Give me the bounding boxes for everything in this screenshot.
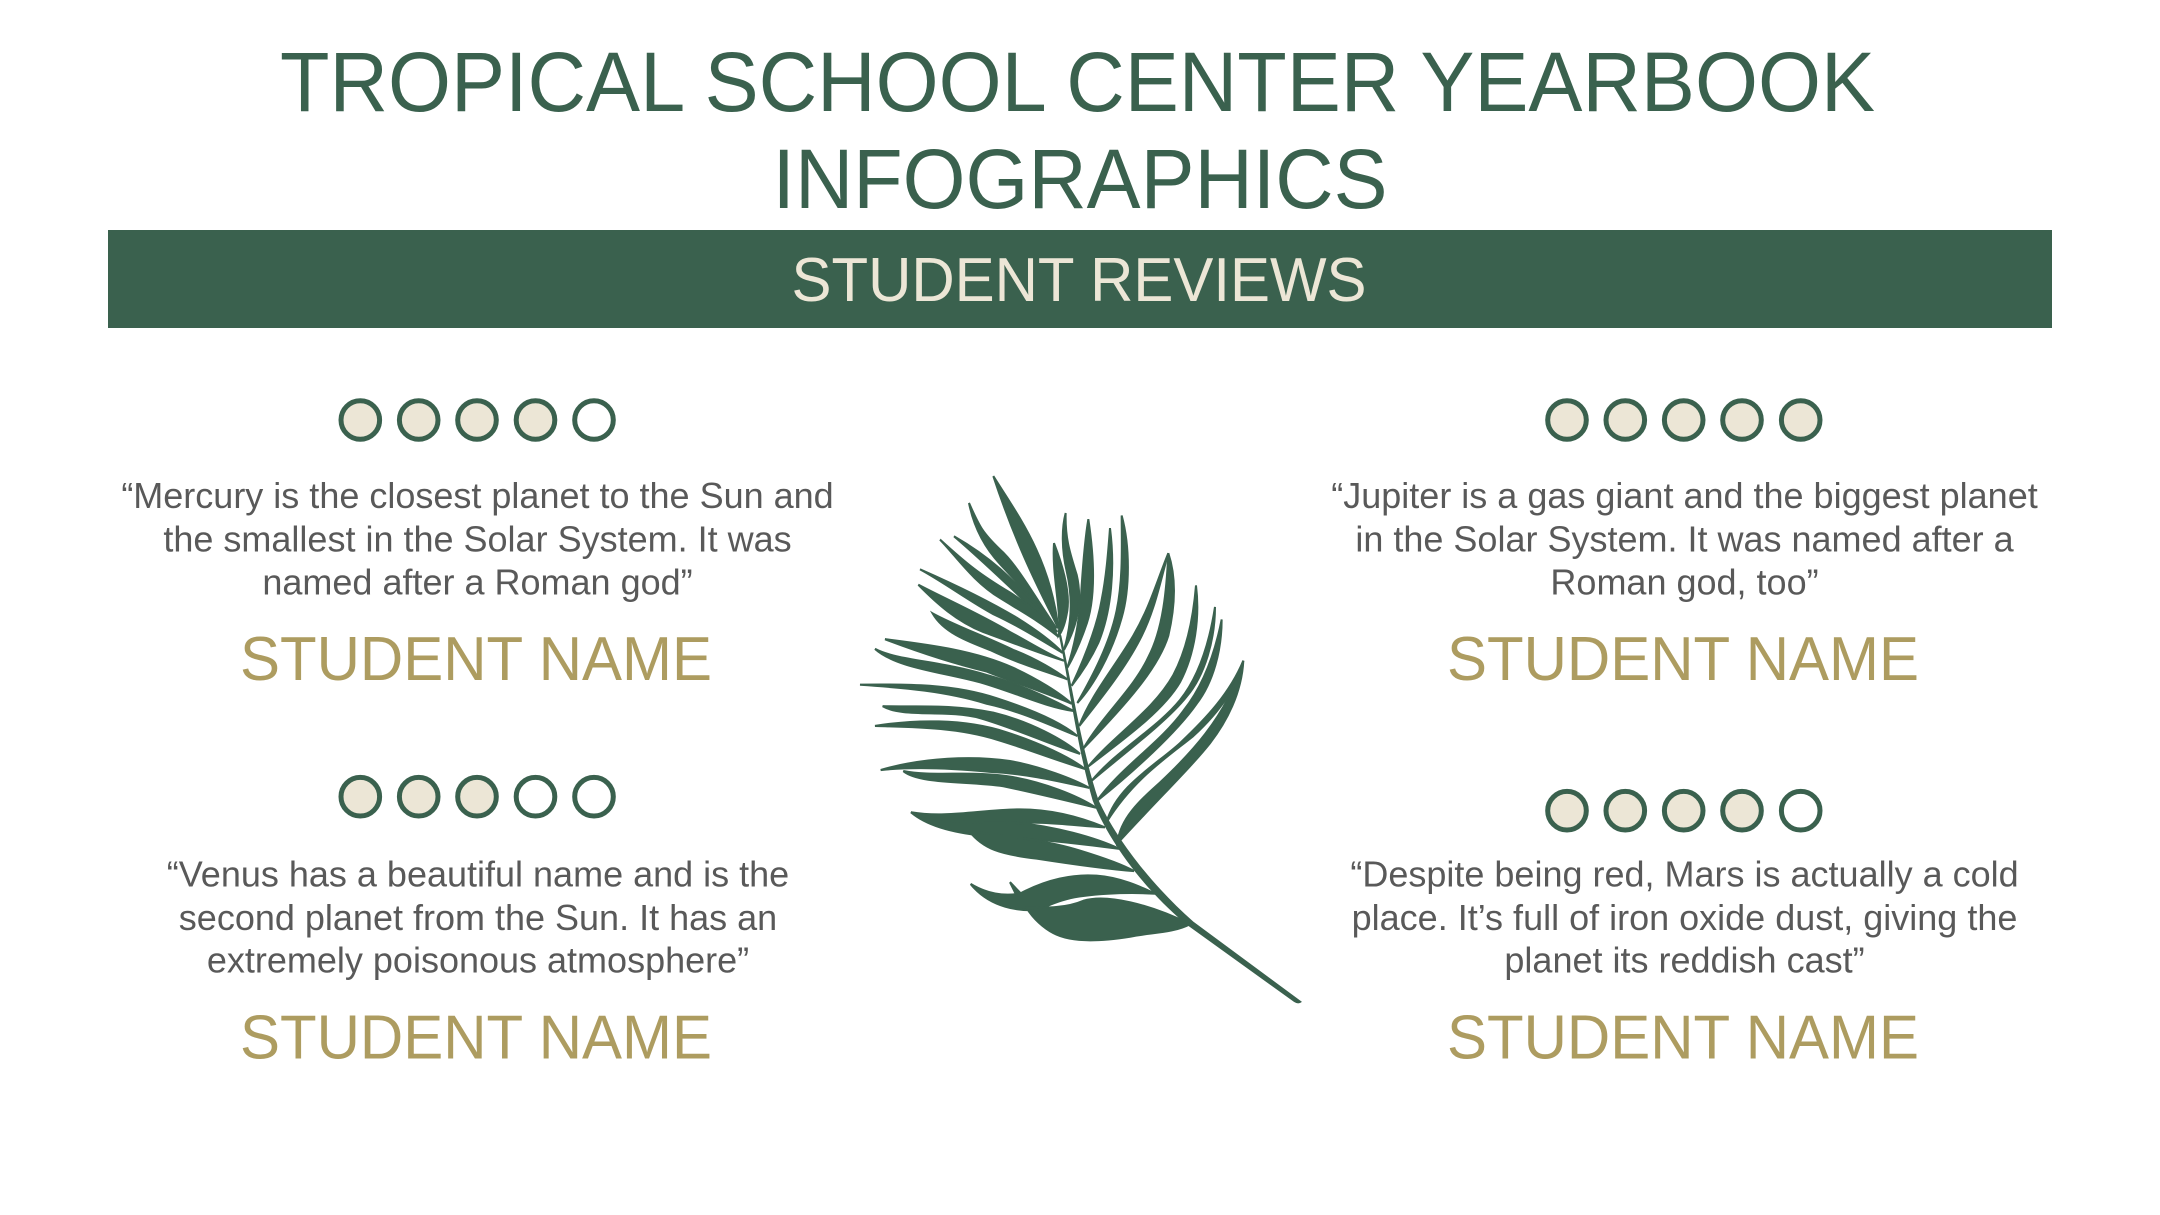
rating: 4 of 5 circles [341, 401, 613, 439]
quote text [167, 854, 789, 981]
title: INFOGRAPHICS [772, 132, 1388, 226]
banner: student reviews: STUDENT REVIEWS [792, 246, 1366, 315]
quote text: Roman god, too” [1550, 562, 1819, 603]
rating: 5 of 5 circles [1548, 401, 1820, 439]
title [280, 35, 1875, 226]
right leaflets [1054, 513, 1243, 843]
review: Mars [1350, 791, 2019, 1073]
review: Jupiter [1331, 401, 2038, 694]
student name: STUDENT NAME [1447, 625, 1919, 694]
review: Venus [167, 777, 789, 1073]
quote text: in the Solar System. It was named after a [1355, 519, 2015, 560]
review: Mercury [121, 401, 834, 694]
quote text: the smallest in the Solar System. It was [163, 519, 792, 560]
quote text [121, 475, 834, 603]
quote text: planet its reddish cast” [1504, 940, 1865, 981]
quote text: extremely poisonous atmosphere” [207, 940, 749, 981]
quote text: named after a Roman god” [262, 562, 693, 603]
quote text: “Jupiter is a gas giant and the biggest planet [1331, 475, 2038, 516]
banner: student reviews [108, 230, 2052, 328]
student name: STUDENT NAME [1447, 1004, 1919, 1073]
title: TROPICAL SCHOOL CENTER YEARBOOK [280, 35, 1875, 129]
quote text: “Despite being red, Mars is actually a cold [1350, 854, 2019, 895]
rating: 4 of 5 circles [1548, 791, 1820, 830]
quote text: place. It’s full of iron oxide dust, giving the [1352, 897, 2017, 938]
quote text [1350, 854, 2019, 981]
student name: STUDENT NAME [240, 1004, 712, 1073]
quote text: second planet from the Sun. It has an [179, 897, 777, 938]
left leaflets [860, 476, 1190, 940]
quote text: “Mercury is the closest planet to the Sun and [121, 475, 834, 516]
quote text: “Venus has a beautiful name and is the [167, 854, 789, 895]
quote text [1331, 475, 2038, 603]
rating: 3 of 5 circles [341, 777, 613, 816]
student name: STUDENT NAME [240, 625, 712, 694]
palm leaf illustration [860, 476, 1302, 1003]
